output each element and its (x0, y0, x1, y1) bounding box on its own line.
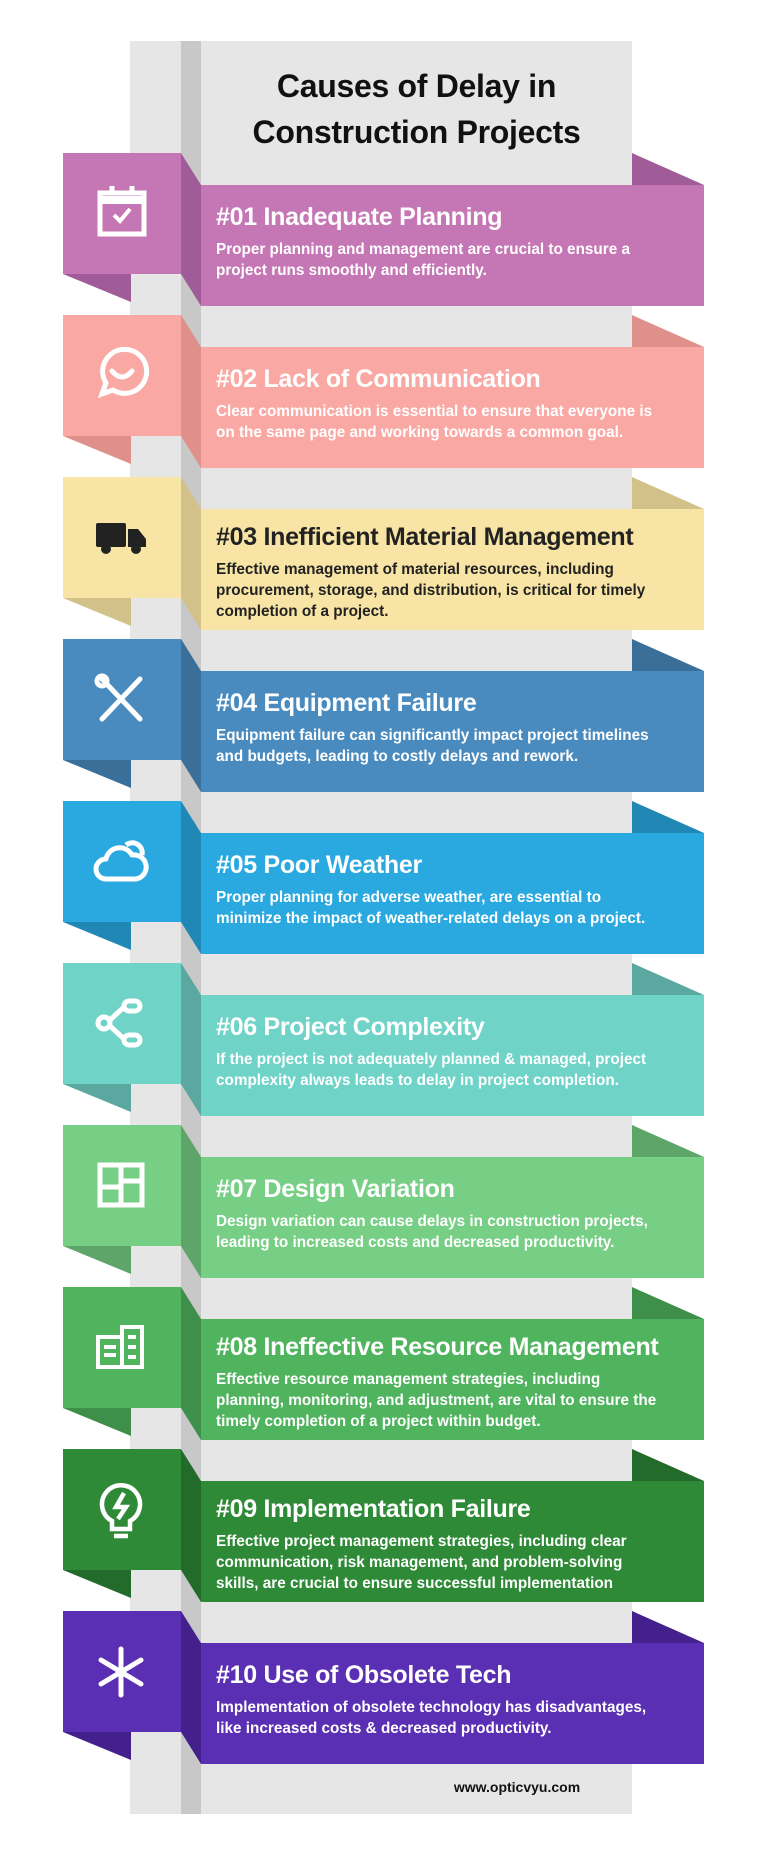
panel: 06: complexity always leads to delay in project completion. (216, 1072, 619, 1089)
panel: 02 (63, 315, 704, 468)
panel: 07 (63, 1125, 704, 1278)
icon: cloud (96, 843, 146, 879)
panel: 08 (63, 1287, 704, 1440)
title: Construction Projects (253, 114, 580, 150)
panel: 10: Implementation of obsolete technology has disadvantages, (216, 1699, 646, 1716)
panel: 01: #01 Inadequate Planning (216, 203, 502, 231)
icon: buildings (98, 1327, 142, 1367)
panel: 05 (63, 801, 704, 954)
panel: 02: on the same page and working towards a common goal. (216, 424, 623, 441)
panel: 07: leading to increased costs and decreased productivity. (216, 1234, 614, 1251)
panel: 07: #07 Design Variation (216, 1175, 455, 1203)
icon: calendar (100, 186, 144, 234)
panel: 08: timely completion of a project within budget. (216, 1413, 541, 1430)
panel: 08: #08 Ineffective Resource Management (216, 1333, 658, 1361)
background column (130, 41, 632, 1814)
panel: 02: Clear communication is essential to ensure that everyone is (216, 403, 652, 420)
icon: asterisk (101, 1649, 141, 1695)
title (253, 68, 580, 150)
panel: 10 (63, 1611, 704, 1764)
panel: 01: Proper planning and management are crucial to ensure a (216, 241, 630, 258)
panel: 05: Proper planning for adverse weather, are essential to (216, 889, 601, 906)
panel: 09 (63, 1449, 704, 1602)
panel: 05: minimize the impact of weather-related delays on a project. (216, 910, 645, 927)
panel: 09: #09 Implementation Failure (216, 1495, 531, 1523)
panel: 04: Equipment failure can significantly impact project timelines (216, 727, 649, 744)
panel: 03: Effective management of material resources, including (216, 561, 614, 578)
panel: 04 (63, 639, 704, 792)
icon: truck (96, 523, 146, 554)
panel: 10: like increased costs & decreased productivity. (216, 1720, 552, 1737)
panel: 07: Design variation can cause delays in construction projects, (216, 1213, 648, 1230)
panel: 03: procurement, storage, and distribution, is critical for timely (216, 582, 645, 599)
panel: 08: Effective resource management strategies, including (216, 1371, 600, 1388)
panel: 02: #02 Lack of Communication (216, 365, 541, 393)
panel: 03 (63, 477, 704, 630)
panel: 01: project runs smoothly and efficiently. (216, 262, 487, 279)
panel: 04: #04 Equipment Failure (216, 689, 476, 717)
footer url: www.opticvyu.com (454, 1779, 580, 1795)
panel: 01 (63, 153, 704, 306)
panel: 03: completion of a project. (216, 603, 389, 620)
panel: 06: #06 Project Complexity (216, 1013, 485, 1041)
panel: 10: #10 Use of Obsolete Tech (216, 1661, 511, 1689)
icon: chat (102, 349, 147, 394)
spine strip (181, 41, 201, 1814)
panel: 05: #05 Poor Weather (216, 851, 422, 879)
icon: tools (97, 676, 140, 719)
panel: 06 (63, 963, 704, 1116)
panel: 09: Effective project management strategies, including clear (216, 1533, 627, 1550)
panel: 09: communication, risk management, and problem-solving (216, 1554, 622, 1571)
panel: 09: skills, are crucial to ensure successful implementation (216, 1575, 613, 1592)
title: Causes of Delay in (277, 68, 556, 104)
icon: flow (98, 1001, 140, 1045)
panel: 06: If the project is not adequately planned & managed, project (216, 1051, 646, 1068)
panel: 03: #03 Inefficient Material Management (216, 523, 633, 551)
icon: layout (100, 1165, 142, 1205)
icon: bulb (102, 1485, 140, 1536)
panel: 08: planning, monitoring, and adjustment, are vital to ensure the (216, 1392, 656, 1409)
panel: 04: and budgets, leading to costly delays and rework. (216, 748, 578, 765)
